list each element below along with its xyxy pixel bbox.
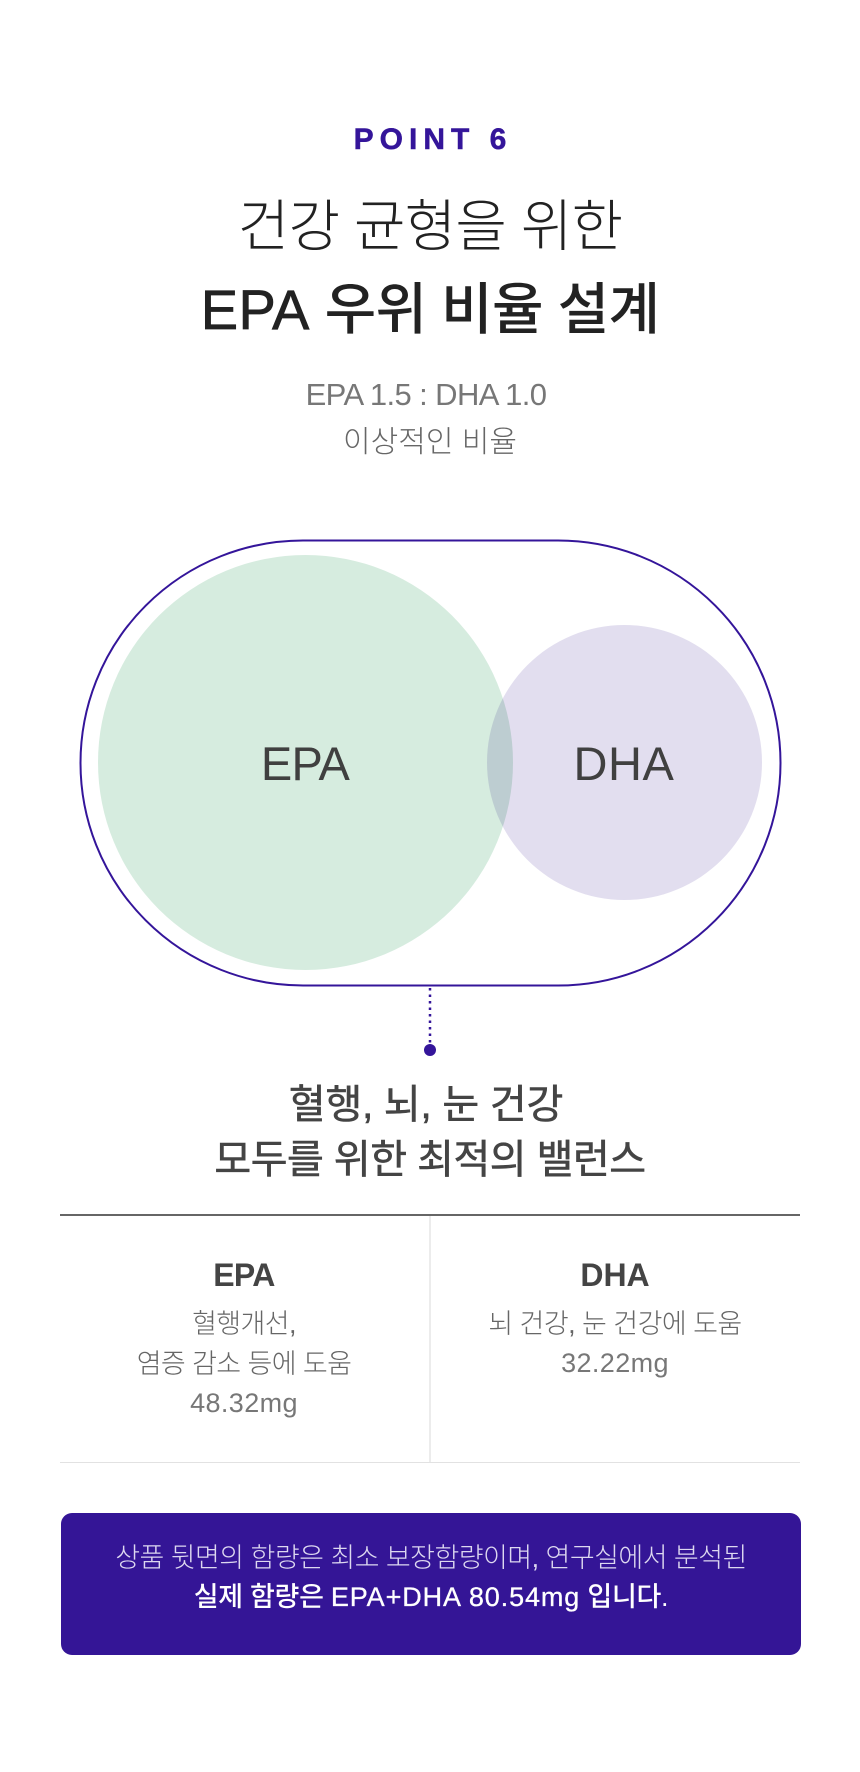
- DHA description: 뇌 건강, 눈 건강에 도움: [488, 1309, 742, 1339]
- EPA label: EPA: [261, 737, 351, 790]
- callout line 1: 상품 뒷면의 함량은 최소 보장함량이며, 연구실에서 분석된: [115, 1543, 747, 1573]
- balance heading: [214, 1083, 646, 1182]
- EPA circle: [98, 555, 513, 970]
- table bottom rule: [60, 1462, 800, 1463]
- EPA amount: 48.32mg: [190, 1388, 298, 1418]
- DHA column heading: DHA: [580, 1257, 650, 1293]
- heading line 1: 혈행, 뇌, 눈 건강: [289, 1083, 563, 1127]
- heading line 2: 모두를 위한 최적의 밸런스: [214, 1138, 646, 1182]
- connector dotted line: [429, 988, 431, 1046]
- pill outline: [80, 540, 780, 986]
- ratio line: EPA 1.5 : DHA 1.0: [306, 377, 546, 412]
- title: [201, 195, 659, 341]
- venn diagram: [80, 540, 782, 1056]
- callout box: [61, 1513, 801, 1655]
- callout line 2: 실제 함량은 EPA+DHA 80.54mg 입니다.: [194, 1582, 668, 1612]
- EPA column heading: EPA: [213, 1257, 275, 1293]
- DHA column: [488, 1257, 742, 1378]
- EPA description: [137, 1309, 351, 1379]
- DHA circle: [487, 625, 762, 900]
- title line 1: 건강 균형을 위한: [238, 195, 622, 258]
- table top rule: [60, 1214, 800, 1216]
- eyebrow: POINT 6: POINT 6: [354, 123, 512, 156]
- subtitle: ratio: [306, 377, 546, 459]
- EPA description: 혈행개선,: [192, 1309, 296, 1339]
- DHA amount: 32.22mg: [561, 1348, 669, 1378]
- title line 2: EPA 우위 비율 설계: [201, 278, 659, 341]
- EPA description: 염증 감소 등에 도움: [137, 1349, 351, 1379]
- EPA column: [137, 1257, 351, 1418]
- connector dot: [424, 1044, 436, 1056]
- DHA label: DHA: [573, 737, 675, 790]
- ratio caption: 이상적인 비율: [343, 426, 517, 459]
- table column divider: [429, 1216, 431, 1463]
